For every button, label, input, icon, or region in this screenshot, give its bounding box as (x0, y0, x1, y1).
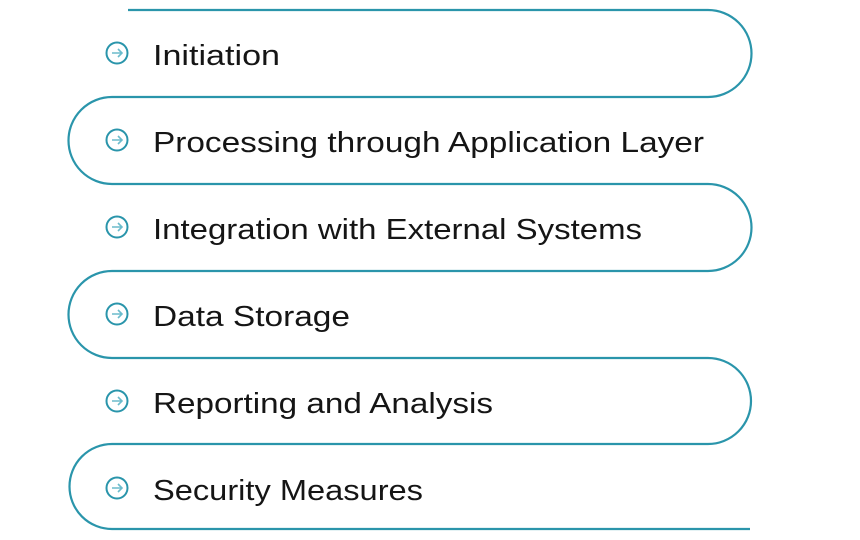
step 1: Initiation: Initiation (153, 40, 280, 72)
step 4: Data Storage: Data Storage (153, 301, 350, 333)
icon: arrow circle (106, 478, 128, 498)
step 6: Security Measures: Security Measures (153, 475, 423, 507)
icon: arrow circle (106, 390, 128, 412)
icon: arrow circle (106, 130, 128, 150)
serpentine track line (69, 10, 752, 529)
step 5: Reporting and Analysis: Reporting and Analysis (153, 388, 493, 420)
icon: arrow circle (106, 216, 128, 238)
step 2: Processing through Application Layer: Processing through Application Layer (153, 127, 704, 159)
icon: arrow circle (106, 304, 128, 324)
step 3: Integration with External Systems: Integration with External Systems (153, 214, 642, 246)
icon: arrow circle (106, 42, 128, 64)
step 1: Initiation (106, 40, 280, 72)
